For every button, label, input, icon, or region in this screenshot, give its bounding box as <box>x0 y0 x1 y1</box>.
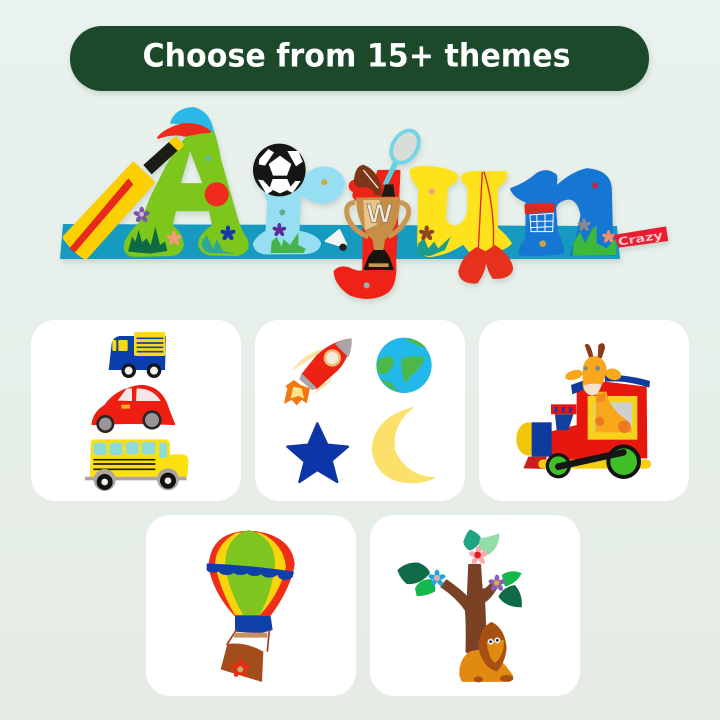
rocket <box>284 338 352 405</box>
left half: bat, A, r <box>64 107 347 258</box>
right half: j, u, n <box>335 123 668 298</box>
teal felt board <box>60 224 620 259</box>
panel: hot air balloon <box>146 515 356 696</box>
football <box>253 144 306 196</box>
letter u <box>411 167 511 257</box>
boiler <box>516 422 552 469</box>
moon <box>372 407 437 483</box>
panel: tree and lion <box>370 515 580 696</box>
basket flower <box>230 659 250 678</box>
blue cap <box>158 107 214 138</box>
pins <box>206 156 327 215</box>
title banner <box>70 26 649 91</box>
title text: Choose from 15+ themes <box>142 37 570 75</box>
racket <box>382 123 427 197</box>
trophy <box>347 197 409 270</box>
letter n <box>511 169 617 256</box>
balloon envelope <box>207 530 295 617</box>
blossoms <box>428 546 506 592</box>
balloon neck <box>235 616 273 633</box>
base <box>538 460 651 469</box>
trophy: W <box>367 198 393 228</box>
boxing gloves <box>459 172 512 282</box>
rugby ball <box>352 166 381 203</box>
giraffe <box>564 343 632 433</box>
wheels <box>546 444 641 479</box>
school bus <box>85 439 188 491</box>
cab roof <box>571 374 650 394</box>
star <box>287 423 348 482</box>
panel: train <box>479 320 689 501</box>
shuttlecock <box>326 230 347 251</box>
brand tag: Crazy <box>617 229 664 249</box>
chimney <box>551 404 576 430</box>
letter r <box>254 167 344 253</box>
cricket bat <box>64 138 183 258</box>
tree artwork <box>397 529 522 682</box>
letter j <box>335 171 399 298</box>
panel: vehicles <box>31 320 241 501</box>
panel: space <box>255 320 465 501</box>
window <box>588 396 637 440</box>
brand tag <box>613 226 668 249</box>
truck <box>109 332 166 378</box>
leaves <box>397 529 522 607</box>
train artwork <box>516 343 651 479</box>
car <box>93 386 174 433</box>
felt flowers <box>133 207 236 246</box>
vehicles artwork <box>85 332 188 491</box>
lion <box>461 622 513 682</box>
cab <box>550 382 647 460</box>
strings <box>227 629 269 652</box>
space artwork <box>284 338 437 483</box>
tree <box>442 565 496 652</box>
basket <box>221 644 263 682</box>
earth <box>376 338 432 393</box>
red felt dot on A <box>205 182 229 206</box>
balloon artwork <box>207 530 295 682</box>
letter A <box>125 131 248 256</box>
felt name banner: Arjun <box>60 107 668 298</box>
